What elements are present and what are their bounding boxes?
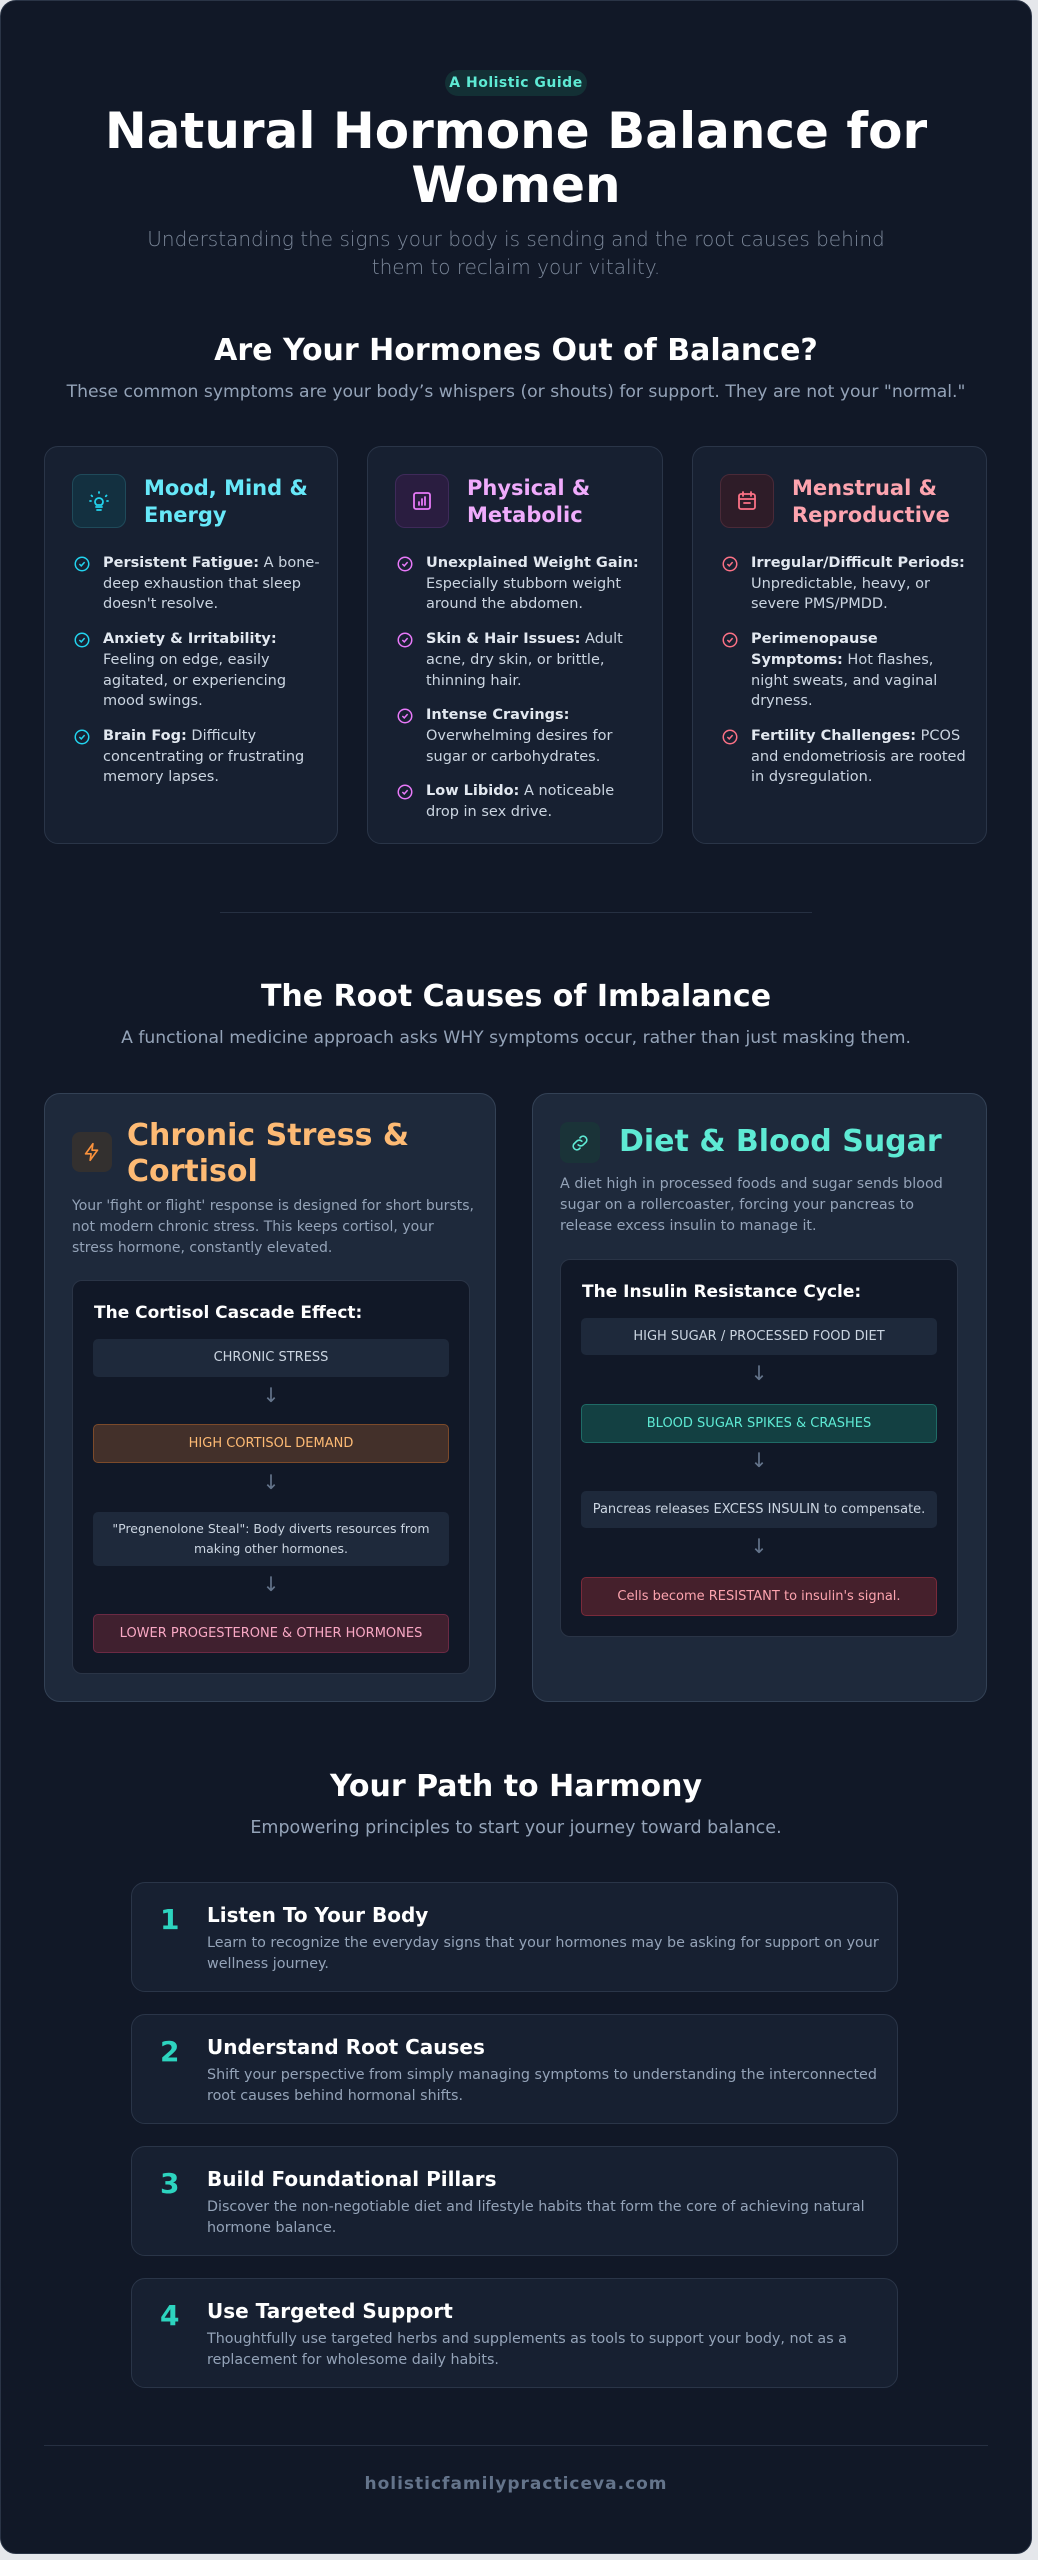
card title bbox=[792, 476, 950, 527]
step 4: 4 bbox=[160, 2299, 179, 2332]
heading: path to harmony: Your Path to Harmony bbox=[330, 1769, 702, 1804]
step 3 bbox=[131, 2146, 898, 2256]
flow: cortisol cascade: ↓ bbox=[263, 1572, 279, 1596]
panel title: Cortisol bbox=[127, 1154, 258, 1189]
step 1: Listen To Your Body bbox=[207, 1903, 428, 1927]
flow: insulin resistance bbox=[560, 1259, 958, 1637]
symptom list: Unexplained Weight Gain: Especially stubborn weight around the abdomen. bbox=[426, 555, 639, 612]
flow: insulin resistance: HIGH SUGAR / PROCESSED FOOD DIET bbox=[633, 1328, 885, 1344]
symptom list: Anxiety & Irritability: Feeling on edge, easily agitated, or experiencing mood swings. bbox=[103, 631, 286, 709]
symptom list bbox=[722, 555, 966, 785]
card title: Metabolic bbox=[467, 503, 583, 527]
step 3: 3 bbox=[160, 2167, 179, 2200]
symptoms subtitle: These common symptoms are your body’s whispers (or shouts) for support. They are not your "normal." bbox=[67, 382, 965, 402]
card title: Reproductive bbox=[792, 503, 950, 527]
symptom list bbox=[398, 555, 639, 820]
flow: cortisol cascade: "Pregnenolone Steal": Body diverts resources from making other hormones. bbox=[112, 1521, 430, 1556]
card title: Menstrual & bbox=[792, 476, 937, 500]
flow: insulin resistance: The Insulin Resistance Cycle: bbox=[582, 1282, 861, 1302]
flow: insulin resistance: ↓ bbox=[751, 1361, 767, 1385]
symptom list: Intense Cravings: Overwhelming desires for sugar or carbohydrates. bbox=[426, 707, 612, 765]
step 2: Understand Root Causes bbox=[207, 2035, 485, 2059]
symptom list: Persistent Fatigue: A bone-deep exhaustion that sleep doesn't resolve. bbox=[103, 555, 320, 612]
panel title bbox=[127, 1118, 409, 1189]
panel: chronic stress bbox=[44, 1093, 496, 1702]
badge bbox=[445, 70, 587, 96]
flow: cortisol cascade: ↓ bbox=[263, 1383, 279, 1407]
step 4 bbox=[131, 2278, 898, 2388]
icon: calendar bbox=[720, 474, 774, 528]
description: A diet high in processed foods and sugar sends blood sugar on a rollercoaster, forcing your pancreas to release excess insulin to manage it. bbox=[560, 1176, 943, 1234]
title bbox=[105, 102, 927, 214]
flow: cortisol cascade: ↓ bbox=[263, 1470, 279, 1494]
flow: insulin resistance: ↓ bbox=[751, 1448, 767, 1472]
flow: insulin resistance: Pancreas releases EXCESS INSULIN to compensate. bbox=[593, 1502, 925, 1516]
step 4: Thoughtfully use targeted herbs and supplements as tools to support your body, not as a replacement for wholesome daily habits. bbox=[207, 2331, 847, 2368]
footer: holisticfamilypracticeva.com bbox=[364, 2474, 668, 2494]
step 1: 1 bbox=[160, 1903, 179, 1936]
step 2: 2 bbox=[160, 2035, 179, 2068]
symptom list bbox=[74, 555, 320, 785]
flow: cortisol cascade: CHRONIC STRESS bbox=[214, 1350, 328, 1365]
title: Natural Hormone Balance for bbox=[105, 102, 927, 160]
panel: menstrual reproductive bbox=[692, 446, 987, 844]
step 1: Learn to recognize the everyday signs that your hormones may be asking for support on your wellness journey. bbox=[207, 1935, 879, 1972]
step 2: Shift your perspective from simply managing symptoms to understanding the interconnected root causes behind hormonal shifts. bbox=[207, 2067, 877, 2104]
card title: Mood, Mind & bbox=[144, 476, 308, 500]
symptom list: Skin & Hair Issues: Adult acne, dry skin, or brittle, thinning hair. bbox=[426, 631, 623, 689]
subtitle: Understanding the signs your body is sending and the root causes behind them to reclaim your vitality. bbox=[147, 227, 885, 279]
badge: A Holistic Guide bbox=[449, 75, 583, 91]
icon: chart bbox=[395, 474, 449, 528]
symptom list: Perimenopause Symptoms: Hot flashes, night sweats, and vaginal dryness. bbox=[751, 631, 937, 709]
flow: cortisol cascade: HIGH CORTISOL DEMAND bbox=[189, 1436, 353, 1450]
description: Your 'fight or flight' response is designed for short bursts, not modern chronic stress. This keeps cortisol, your stress hormone, constantly elevated. bbox=[72, 1198, 474, 1256]
icon: lightbulb bbox=[72, 474, 126, 528]
icon: link bbox=[560, 1122, 600, 1163]
flow: cortisol cascade: LOWER PROGESTERONE & OTHER HORMONES bbox=[120, 1626, 422, 1640]
heading: symptoms: Are Your Hormones Out of Balance? bbox=[214, 333, 818, 368]
symptom list: Fertility Challenges: PCOS and endometriosis are rooted in dysregulation. bbox=[751, 728, 966, 785]
symptom list: Irregular/Difficult Periods: Unpredictable, heavy, or severe PMS/PMDD. bbox=[751, 555, 965, 612]
panel title: Chronic Stress & bbox=[127, 1118, 409, 1153]
panel title: Diet & Blood Sugar bbox=[619, 1124, 942, 1159]
path subtitle: Empowering principles to start your journey toward balance. bbox=[250, 1818, 782, 1838]
flow: insulin resistance: BLOOD SUGAR SPIKES & CRASHES bbox=[647, 1416, 871, 1430]
flow: cortisol cascade: The Cortisol Cascade Effect: bbox=[94, 1303, 362, 1323]
heading: root causes: The Root Causes of Imbalance bbox=[261, 979, 771, 1014]
title: Women bbox=[411, 156, 621, 214]
step 3: Build Foundational Pillars bbox=[207, 2167, 497, 2191]
flow: insulin resistance: ↓ bbox=[751, 1534, 767, 1558]
card title: Energy bbox=[144, 503, 227, 527]
flow: insulin resistance: Cells become RESISTANT to insulin's signal. bbox=[617, 1588, 901, 1604]
card title: Physical & bbox=[467, 476, 590, 500]
symptom list: Low Libido: A noticeable drop in sex drive. bbox=[426, 783, 614, 820]
icon: lightning bbox=[72, 1132, 112, 1172]
root causes subtitle: A functional medicine approach asks WHY symptoms occur, rather than just masking them. bbox=[121, 1028, 911, 1048]
step 4: Use Targeted Support bbox=[207, 2299, 453, 2323]
card title bbox=[144, 476, 308, 527]
symptom list: Brain Fog: Difficulty concentrating or frustrating memory lapses. bbox=[103, 728, 304, 785]
flow: cortisol cascade bbox=[72, 1280, 470, 1674]
step 3: Discover the non-negotiable diet and lifestyle habits that form the core of achieving natural hormone balance. bbox=[207, 2199, 865, 2236]
panel: diet blood sugar bbox=[532, 1093, 987, 1702]
card title bbox=[467, 476, 590, 527]
step 1 bbox=[131, 1882, 898, 1992]
panel: mood mind energy bbox=[44, 446, 338, 844]
panel: physical metabolic bbox=[367, 446, 663, 844]
step 2 bbox=[131, 2014, 898, 2124]
